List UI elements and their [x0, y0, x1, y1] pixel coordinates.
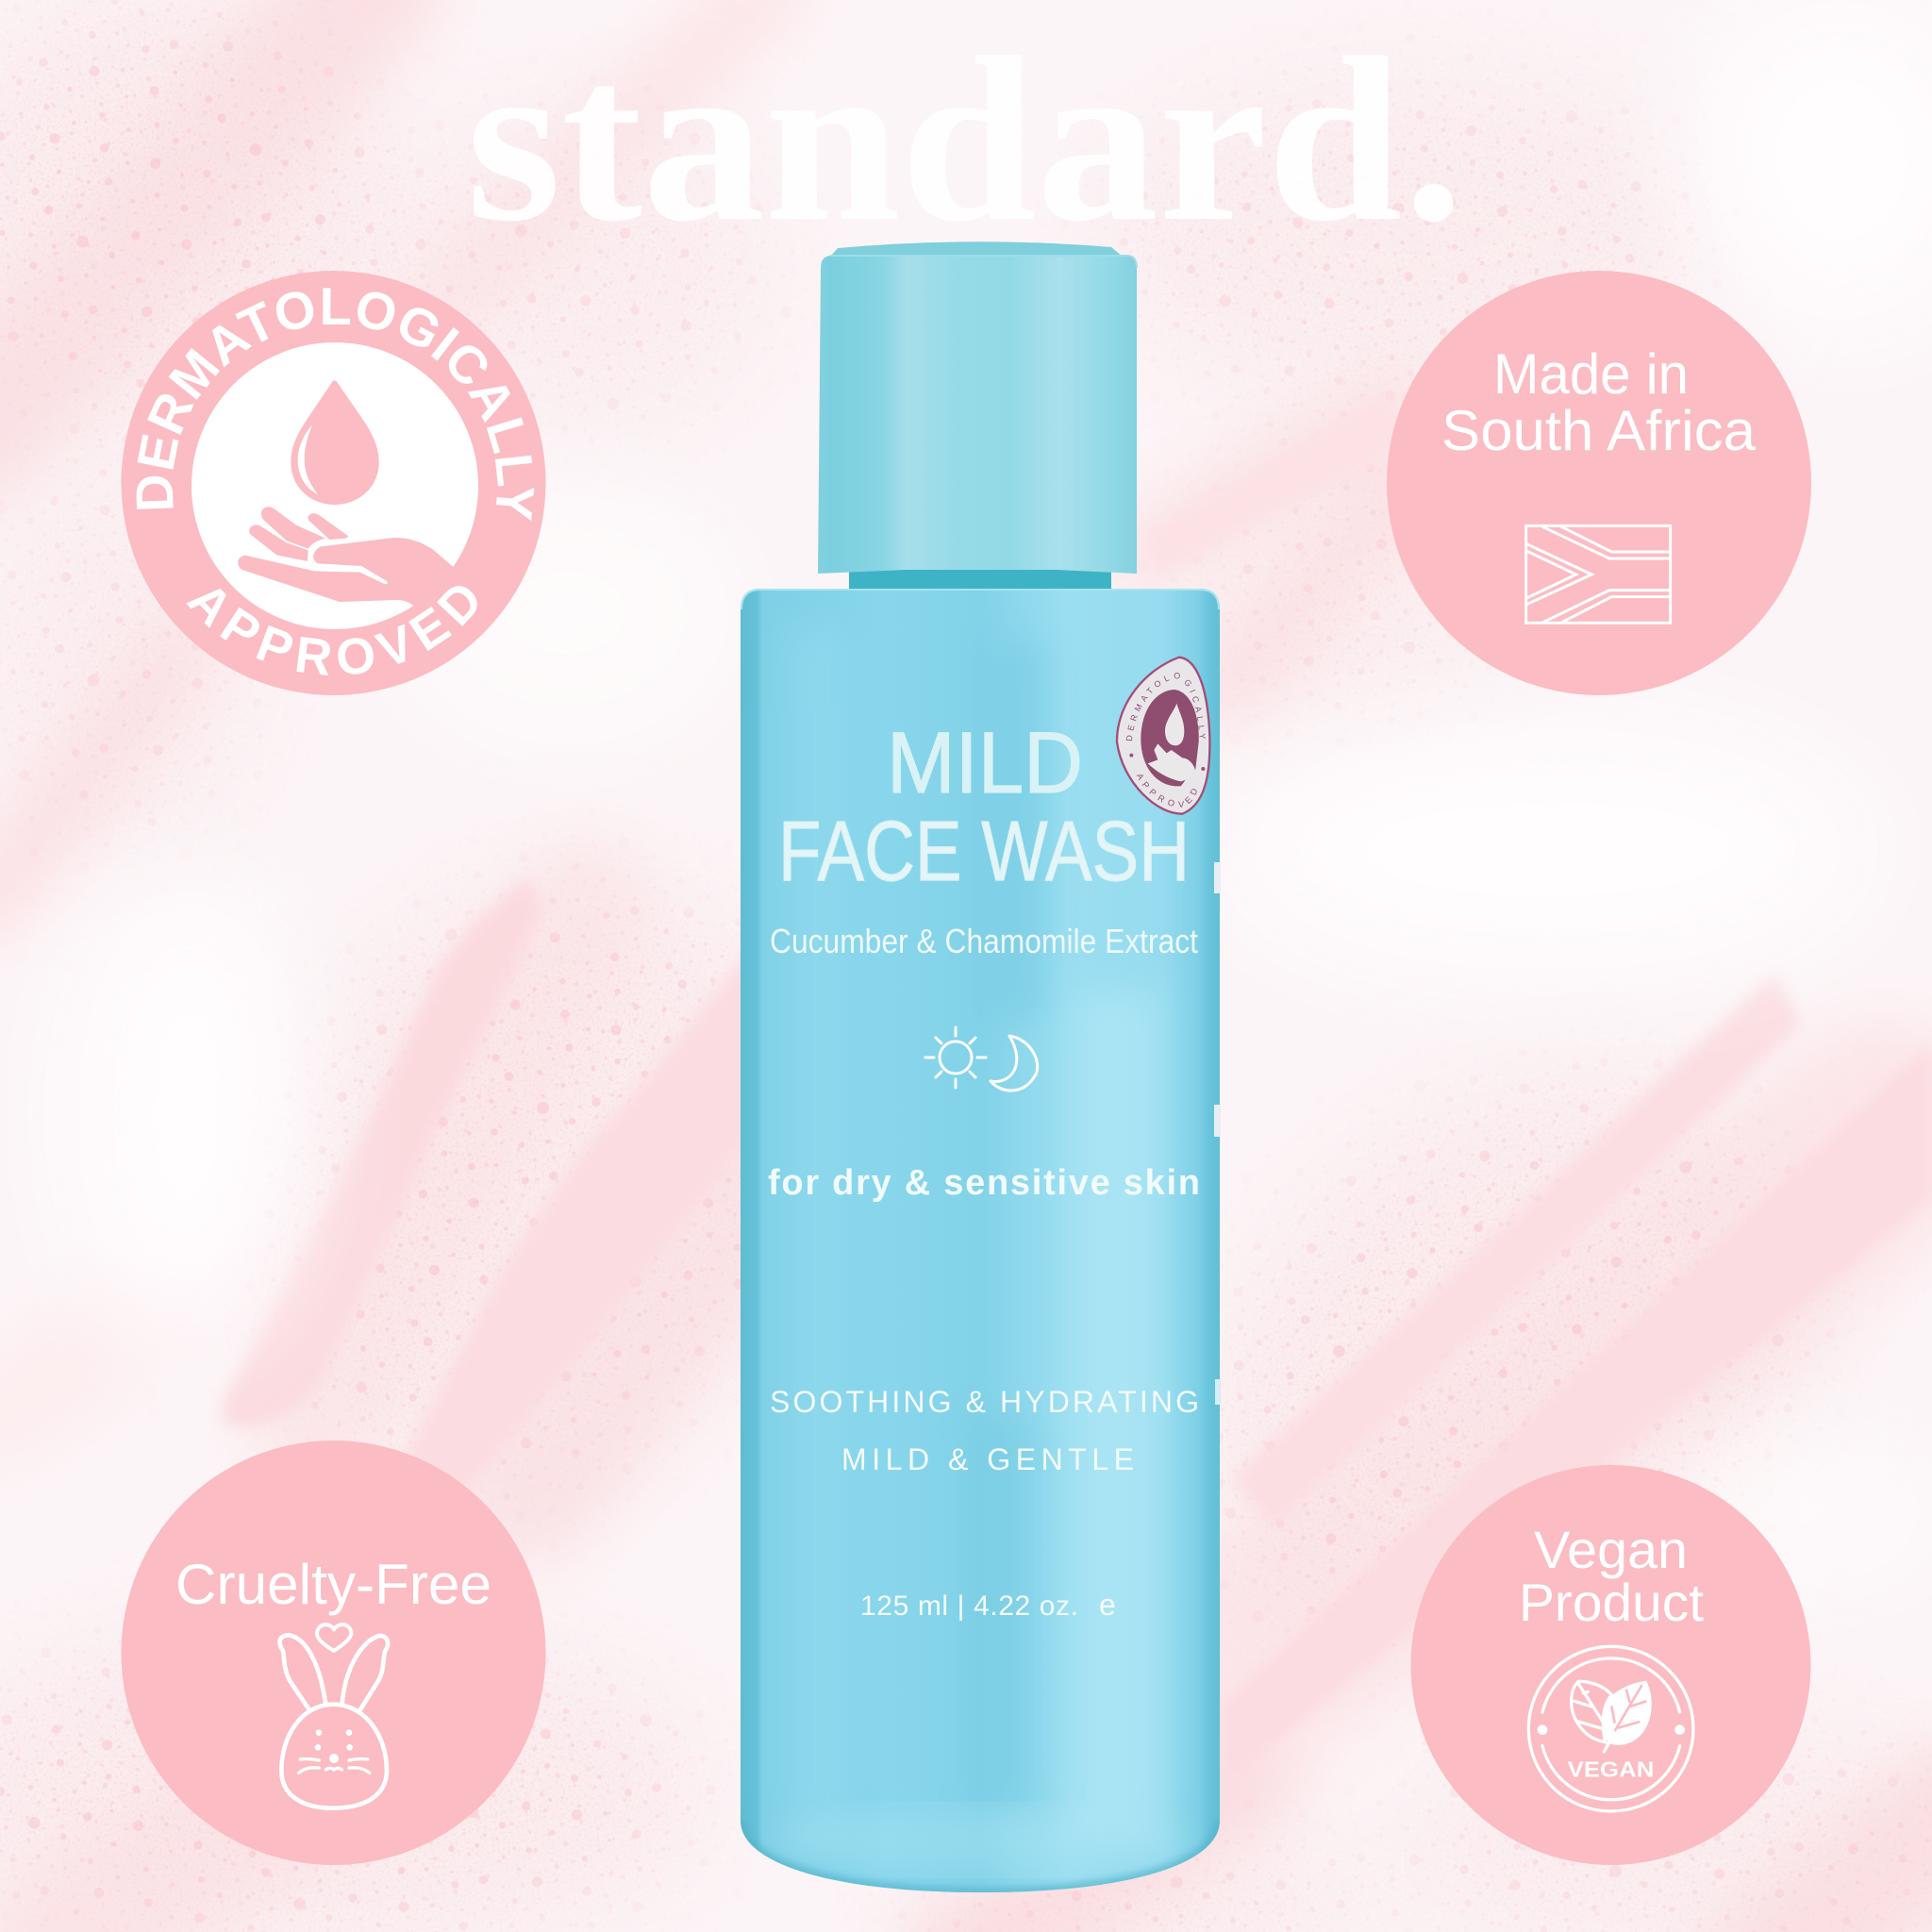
heading: made in south africa [1441, 342, 1757, 462]
badge circle [1411, 1465, 1811, 1865]
badge: vegan product [1411, 1465, 1811, 1865]
heading: vegan product: Vegan [1534, 1520, 1688, 1579]
curved text: approved: APPROVED [186, 586, 477, 675]
heading: cruelty-free: Cruelty-Free [175, 1553, 491, 1616]
heading: made in south africa: South Africa [1441, 399, 1757, 462]
label: cucumber and chamomile extract: Cucumber & Chamomile Extract [770, 922, 1198, 960]
icon: sun [925, 1027, 986, 1088]
product: bottle [741, 242, 1221, 1892]
bottle neck [849, 570, 1111, 592]
sticker: dermatologically approved seal: APPROVED [1135, 772, 1200, 809]
label: soothing and hydrating: SOOTHING & HYDRATING [770, 1385, 1199, 1419]
bottle cap [818, 242, 1137, 574]
background: bright foam patches [75, 0, 1932, 1575]
heading: made in south africa: Made in [1493, 342, 1689, 406]
label: volume: 125 ml | 4.22 oz. [860, 1591, 1078, 1622]
badge ring [121, 271, 545, 695]
bottle body [736, 585, 1226, 1896]
badge circle [121, 1441, 545, 1865]
icon: vegan seal with leaves [1528, 1646, 1693, 1811]
heading: vegan product: Product [1519, 1573, 1704, 1632]
badge: made in south africa [1387, 271, 1811, 695]
label: mild face wash: FACE WASH [778, 805, 1190, 899]
icon: south african flag [1526, 525, 1671, 623]
sticker: dermatologically approved seal: DERMATOLOGICALLY [1126, 673, 1206, 741]
label: for dry and sensitive skin: for dry & sensitive skin [768, 1163, 1200, 1203]
badge: dermatologically approved [121, 271, 546, 695]
label: mild face wash: MILD [887, 715, 1083, 811]
label: mild face wash [778, 715, 1190, 899]
heading: vegan product [1519, 1520, 1704, 1632]
curved text: dermatologically: DERMATOLOGICALLY [136, 288, 534, 521]
label: mild and gentle: MILD & GENTLE [841, 1442, 1134, 1476]
icon: rabbit with heart [280, 1624, 388, 1808]
icon: water drop and hand [238, 380, 472, 606]
icon: moon [991, 1036, 1038, 1091]
badge centre [192, 342, 478, 629]
background: crisp streaks [222, 391, 1932, 1783]
badge: cruelty-free [121, 1441, 545, 1865]
label: estimated sign: e [1099, 1588, 1116, 1622]
sticker: dermatologically approved seal [1117, 658, 1209, 814]
title: standard.: standard. [466, 9, 1464, 271]
icon: vegan seal with leaves: VEGAN [1568, 1757, 1654, 1781]
badge circle [1387, 271, 1811, 695]
